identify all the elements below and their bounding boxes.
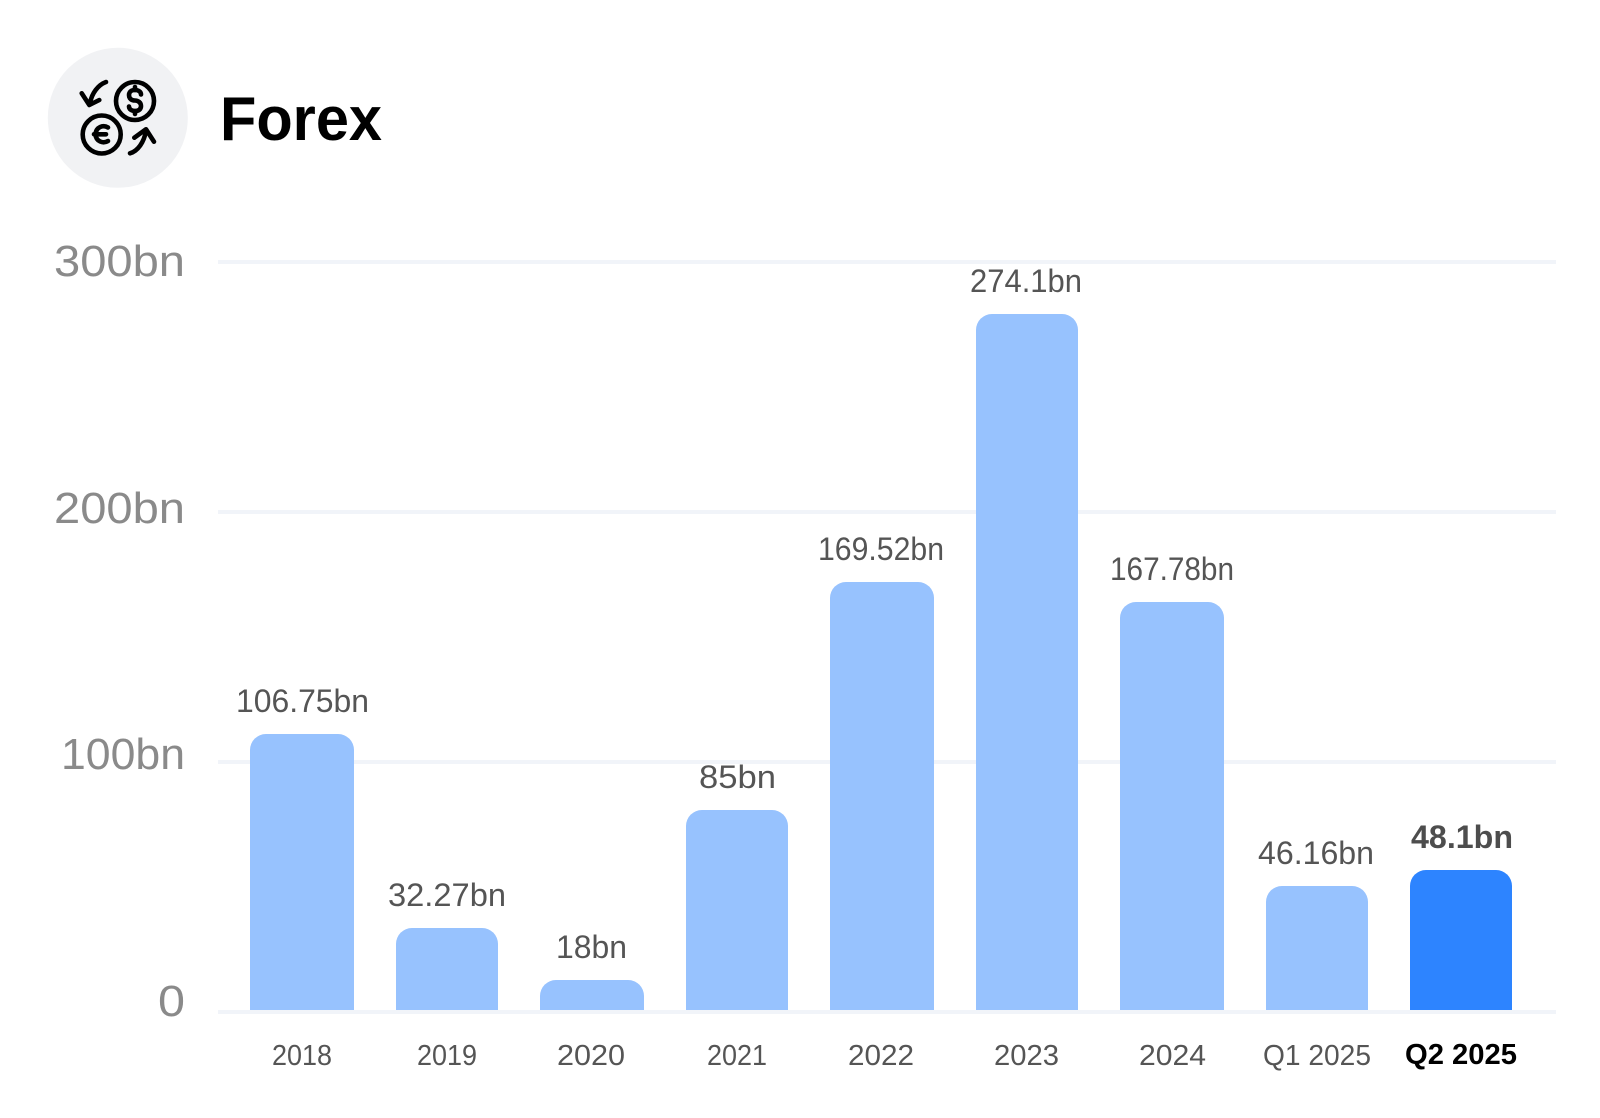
icon: currency exchange [48,48,188,188]
bar: 2018 [250,734,354,1010]
value: 2020: 18bn [556,929,627,965]
value: 2021: 85bn [699,759,776,795]
category: Q2 2025: Q2 2025 [1405,1039,1517,1071]
column: 2018 [236,683,369,1072]
category: 2020: 2020 [557,1040,625,1072]
value: Q2 2025: 48.1bn [1411,819,1513,855]
category: 2022: 2022 [848,1040,914,1072]
bar: 2020 [540,980,644,1010]
column: 2024 [1110,551,1234,1072]
column: 2021 [686,759,788,1072]
header: icon and title [48,48,382,188]
category: 2024: 2024 [1139,1040,1206,1072]
category: 2021: 2021 [707,1040,767,1072]
column: 2020 [540,929,644,1072]
category: 2023: 2023 [994,1040,1059,1072]
value: 2024: 167.78bn [1110,551,1234,587]
y axis labels: 300bn [54,237,185,286]
bar: 2021 [686,810,788,1010]
y axis labels: 100bn [61,730,185,779]
column: Q1 2025 [1258,835,1374,1072]
bar: Q2 2025 [1410,870,1512,1010]
title: Forex [220,85,382,154]
column: Q2 2025 (highlighted) [1405,819,1517,1071]
column: 2022 [818,531,944,1072]
y axis labels: 0 [158,977,185,1026]
value: 2023: 274.1bn [970,263,1082,299]
column: 2019 [388,877,506,1072]
bar: 2022 [830,582,934,1010]
value: 2018: 106.75bn [236,683,369,719]
column: 2023 [970,263,1082,1072]
y axis labels: 200bn [54,484,185,533]
bar: 2023 [976,314,1078,1010]
value: Q1 2025: 46.16bn [1258,835,1374,871]
category: 2019: 2019 [417,1040,477,1072]
y axis labels [54,237,185,1026]
bar: 2019 [396,928,498,1010]
category: 2018: 2018 [272,1040,332,1072]
value: 2019: 32.27bn [388,877,506,913]
bar: Q1 2025 [1266,886,1368,1010]
value: 2022: 169.52bn [818,531,944,567]
bar: 2024 [1120,602,1224,1010]
category: Q1 2025: Q1 2025 [1263,1040,1371,1072]
